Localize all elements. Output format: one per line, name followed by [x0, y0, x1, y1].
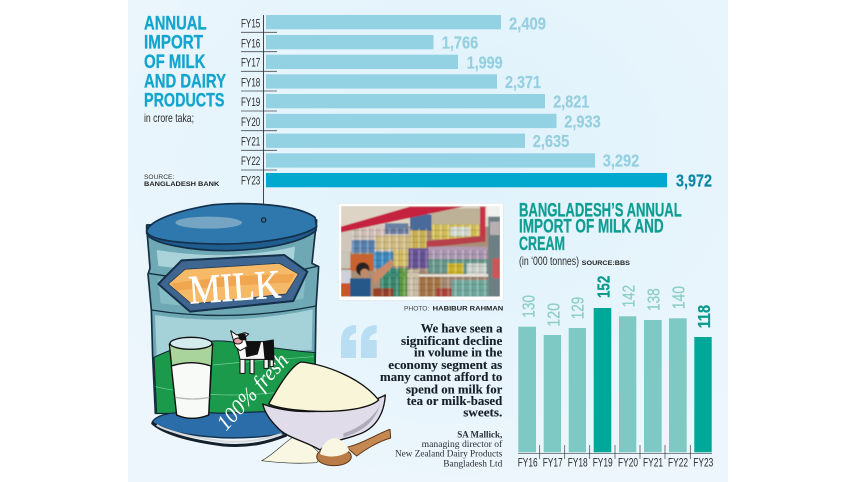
heading: annual import of milk and dairy products: ANNUAL	[144, 13, 207, 34]
horizontal bar chart: import value FY15 to FY23	[241, 13, 712, 218]
quote text: in volume in the	[414, 346, 503, 360]
value labels: 1,766	[442, 33, 479, 53]
value labels: 1,999	[467, 52, 503, 72]
year labels: FY17	[543, 456, 563, 470]
rib separators	[148, 266, 319, 315]
photo credit: HABIBUR RAHMAN	[433, 306, 504, 313]
value labels: 2,371	[505, 72, 541, 92]
year labels: FY17	[241, 56, 261, 70]
icon: quotation mark	[341, 325, 377, 358]
source: Bangladesh Bank	[144, 174, 220, 188]
can lid	[147, 204, 317, 251]
rotated value labels: 120	[543, 303, 563, 327]
heading: Bangladesh's annual import of milk and cream: IMPORT OF MILK AND	[519, 216, 664, 237]
rotated value labels: 138	[643, 288, 663, 311]
year labels: FY16	[241, 36, 261, 50]
year labels: FY22	[668, 456, 688, 470]
year labels: FY23	[241, 174, 261, 188]
year labels	[518, 456, 714, 470]
year labels: FY16	[518, 456, 538, 470]
lower rib highlight	[155, 309, 313, 357]
quote text: many cannot afford to	[380, 370, 502, 384]
value labels	[442, 13, 712, 191]
cow	[231, 331, 274, 374]
value labels: 3,972	[676, 171, 712, 191]
source: Bangladesh Bank: BANGLADESH BANK	[144, 181, 220, 188]
quote attribution: SA Mallick,	[457, 430, 502, 440]
bars	[266, 15, 667, 187]
heading: Bangladesh's annual import of milk and cream: BANGLADESH’S ANNUAL	[519, 200, 682, 222]
upper rib highlight	[157, 247, 295, 270]
powder mound	[269, 362, 379, 411]
wooden spoon	[317, 429, 391, 466]
value labels: 2,409	[509, 13, 546, 33]
year labels: FY22	[241, 154, 261, 168]
middle rib highlight	[158, 274, 306, 307]
source: Bangladesh Bank: SOURCE:	[144, 174, 175, 181]
value labels: 2,933	[564, 111, 601, 131]
quote text: sweets.	[463, 406, 502, 420]
heading: Bangladesh's annual import of milk and cream: CREAM	[519, 234, 565, 255]
rotated value labels	[518, 275, 714, 328]
heading: annual import of milk and dairy products: AND DAIRY	[144, 72, 226, 93]
heading: Bangladesh's annual import of milk and cream	[519, 200, 682, 255]
glass of milk	[169, 337, 213, 418]
year labels	[241, 17, 261, 188]
year labels: FY23	[693, 456, 714, 470]
unit and source note: SOURCE:BBS	[582, 260, 630, 267]
can blue base	[152, 410, 310, 438]
year labels: FY20	[241, 115, 261, 129]
fresh lettering on can: 100% fresh	[211, 348, 293, 435]
leader ring	[261, 218, 266, 222]
milk label	[158, 255, 307, 313]
rotated value labels: 130	[518, 295, 538, 318]
year labels: FY21	[241, 134, 261, 148]
can body silhouette	[147, 232, 319, 415]
value labels: 2,635	[533, 131, 570, 151]
axis leader line	[262, 15, 264, 218]
quote text: significant decline	[401, 334, 503, 348]
rotated value labels: 129	[567, 297, 587, 319]
background panel	[128, 0, 728, 482]
year labels: FY18	[241, 75, 261, 89]
heading: annual import of milk and dairy products: OF MILK	[144, 52, 206, 73]
column chart: milk and cream import volume FY16 to FY23	[518, 275, 714, 470]
quote text	[380, 322, 503, 420]
illustration: milk can with glass, cow and bowl of milk powder	[147, 204, 391, 466]
heading: annual import of milk and dairy products: PRODUCTS	[144, 91, 224, 112]
columns	[518, 308, 712, 452]
value labels: 2,821	[553, 92, 590, 112]
quote text: economy segment as	[388, 358, 502, 372]
bowl	[263, 395, 385, 450]
quote text: spend on milk for	[406, 382, 503, 396]
milk label: MILK	[187, 261, 282, 313]
quote attribution	[395, 430, 503, 470]
quote text: tea or milk-based	[407, 394, 502, 408]
rotated value labels: 140	[668, 286, 688, 309]
unit and source note: (in ‘000 tonnes)	[519, 254, 579, 268]
year labels: FY18	[568, 456, 588, 470]
quote attribution: managing director of	[422, 439, 503, 450]
milk powder pile	[262, 436, 322, 463]
can green hill band	[154, 341, 315, 413]
rotated value labels: 118	[694, 305, 714, 328]
photo: customer at dairy store shelves	[338, 203, 503, 300]
can bottom rim	[152, 423, 287, 446]
photo credit: PHOTO:	[404, 306, 430, 313]
heading: annual import of milk and dairy products	[144, 13, 226, 112]
value labels: 3,292	[603, 150, 640, 170]
year labels: FY20	[618, 456, 638, 470]
rotated value labels: 142	[618, 285, 638, 307]
year labels: FY15	[241, 17, 261, 31]
quote attribution: Bangladesh Ltd	[443, 460, 503, 470]
quote text: We have seen a	[421, 322, 503, 336]
year labels: FY19	[593, 456, 613, 470]
rotated value labels: 152	[593, 275, 613, 298]
heading: annual import of milk and dairy products: IMPORT	[144, 33, 203, 54]
quote attribution: New Zealand Dairy Products	[395, 450, 503, 460]
year labels: FY19	[241, 95, 261, 109]
unit note: in crore taka;	[144, 111, 194, 125]
year labels: FY21	[643, 456, 663, 470]
photo credit	[404, 306, 504, 313]
